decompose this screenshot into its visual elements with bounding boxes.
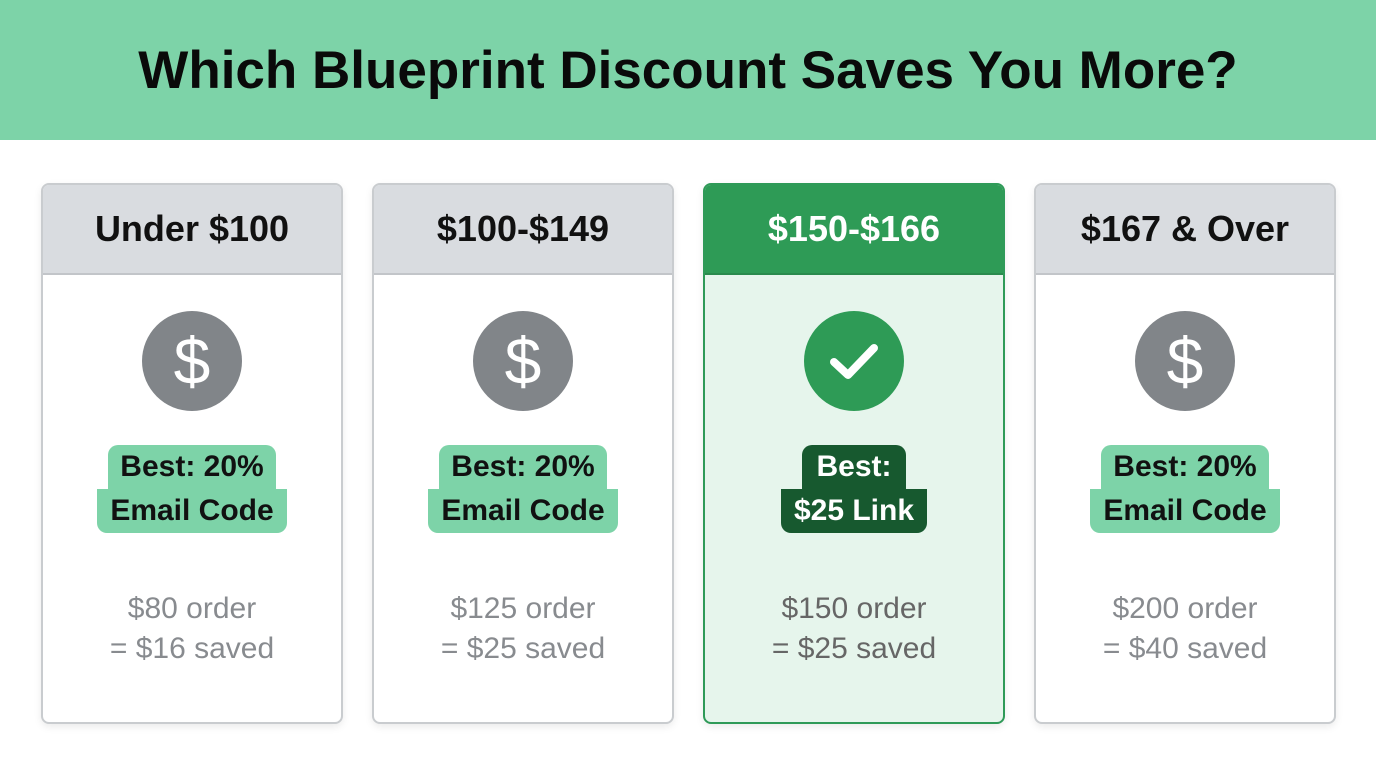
example: $125 order <box>450 592 596 625</box>
title: Which Blueprint Discount Saves You More? <box>138 40 1238 100</box>
heading: $150-$166 <box>768 208 940 249</box>
badge: Email Code <box>1103 494 1267 527</box>
example <box>441 592 605 665</box>
panel: $167 & over <box>1034 183 1336 724</box>
heading: Under $100 <box>95 208 289 249</box>
badge <box>97 445 287 533</box>
heading <box>705 185 1003 275</box>
badge: Email Code <box>110 494 274 527</box>
heading <box>43 185 341 275</box>
panel: $150-$166 highlighted <box>703 183 1005 724</box>
icon: dollar: $ <box>1167 324 1203 398</box>
heading <box>1036 185 1334 275</box>
badge: $25 Link <box>794 494 914 527</box>
badge: Email Code <box>441 494 605 527</box>
panel: $100-$149 <box>372 183 674 724</box>
panel: under $100 <box>41 183 343 724</box>
badge <box>428 445 618 533</box>
example: = $25 saved <box>772 632 936 665</box>
example: = $16 saved <box>110 632 274 665</box>
example: = $25 saved <box>441 632 605 665</box>
badge: Best: 20% <box>120 450 264 483</box>
badge <box>781 445 927 533</box>
badge: Best: 20% <box>1113 450 1257 483</box>
badge: Best: 20% <box>451 450 595 483</box>
example: $150 order <box>781 592 927 625</box>
example <box>772 592 936 665</box>
icon: dollar <box>142 311 242 411</box>
icon: dollar <box>473 311 573 411</box>
title <box>0 0 1376 140</box>
example: $200 order <box>1112 592 1258 625</box>
icon: checkmark <box>804 311 904 411</box>
example <box>1103 592 1267 665</box>
badge <box>1090 445 1280 533</box>
icon: dollar: $ <box>174 324 210 398</box>
heading <box>374 185 672 275</box>
badge: Best: <box>816 450 892 483</box>
icon: dollar: $ <box>505 324 541 398</box>
example <box>110 592 274 665</box>
heading: $167 & Over <box>1081 208 1289 249</box>
icon: dollar <box>1135 311 1235 411</box>
example: $80 order <box>128 592 256 625</box>
example: = $40 saved <box>1103 632 1267 665</box>
heading: $100-$149 <box>437 208 609 249</box>
